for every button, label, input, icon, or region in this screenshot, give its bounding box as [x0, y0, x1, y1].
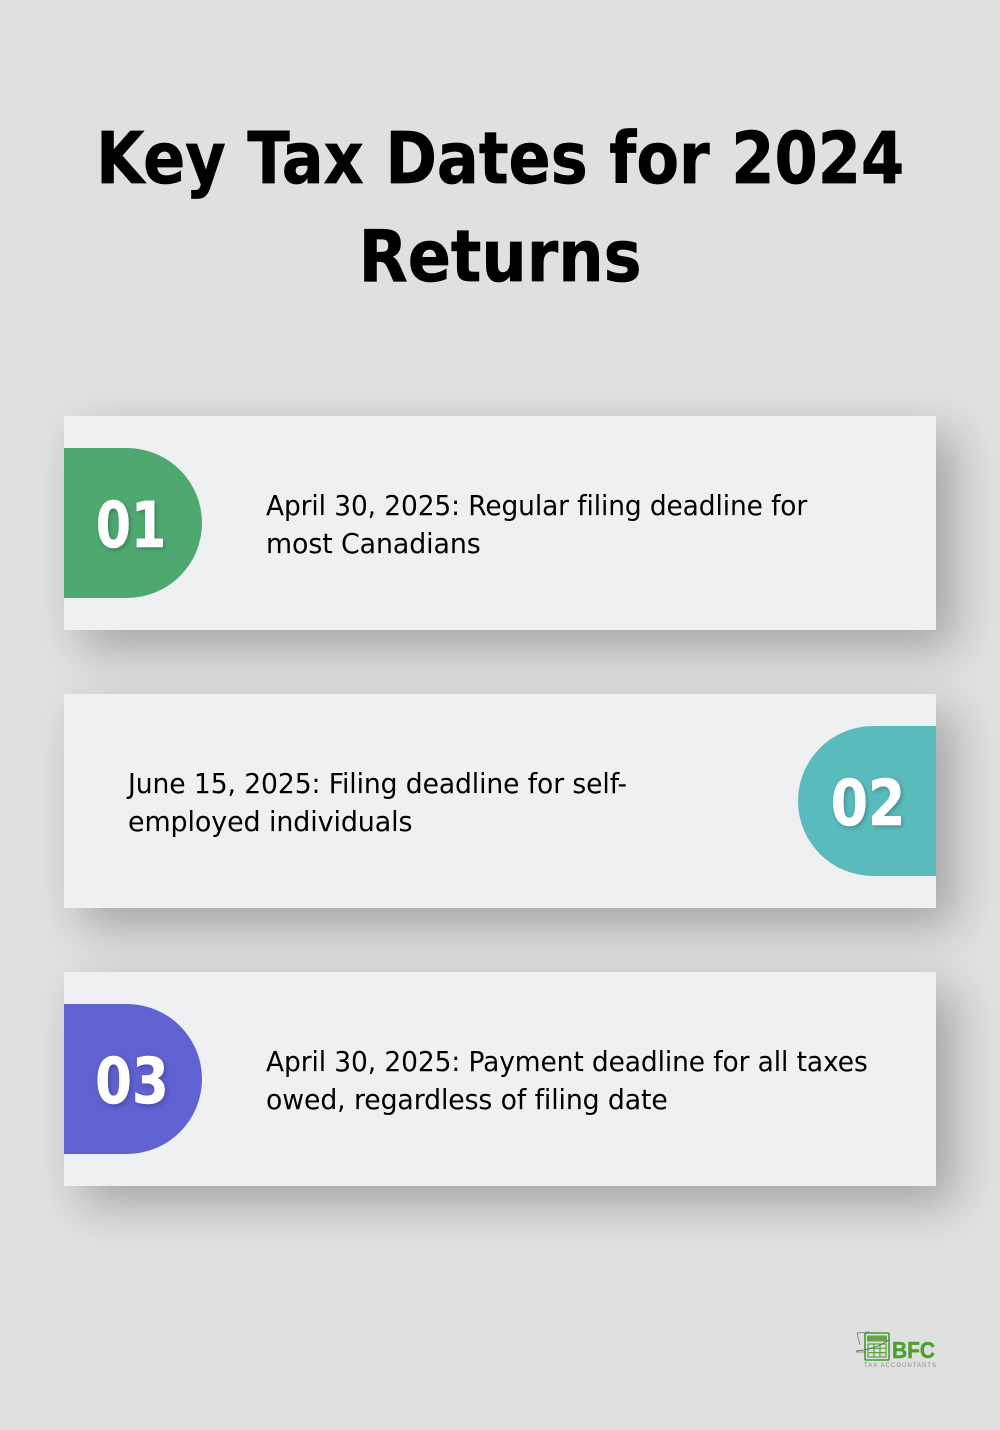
- icon: calculator: [856, 1332, 890, 1360]
- logo tagline: TAX ACCOUNTANTS: [864, 1363, 936, 1369]
- logo wordmark: BFC: [892, 1337, 935, 1363]
- title: Key Tax Dates for 2024: [96, 117, 904, 200]
- badge 01: 01: [96, 489, 166, 562]
- text: card 01: April 30, 2025: Regular filing deadline for: [266, 490, 807, 522]
- badge 03: [64, 1004, 202, 1154]
- text: card 01: most Canadians: [266, 528, 481, 560]
- badge 02: [798, 726, 936, 876]
- logo: BFC Tax Accountants: [856, 1332, 936, 1369]
- text: card 03: [266, 1046, 868, 1116]
- text: card 02: [126, 768, 627, 838]
- text: card 02: June 15, 2025: Filing deadline for self-: [128, 768, 627, 800]
- text: card 02: employed individuals: [128, 806, 412, 838]
- text: card 03: owed, regardless of filing date: [266, 1084, 668, 1116]
- title: [96, 117, 904, 298]
- badge 01: [64, 448, 202, 598]
- panel: card 02: [64, 694, 936, 908]
- panel: card 01: [64, 416, 936, 630]
- text: card 03: April 30, 2025: Payment deadline for all taxes: [266, 1046, 868, 1078]
- panel: card 03: [64, 972, 936, 1186]
- title: Returns: [359, 215, 642, 298]
- badge 02: 02: [831, 767, 905, 840]
- text: card 01: [266, 490, 808, 560]
- badge 03: 03: [95, 1045, 169, 1118]
